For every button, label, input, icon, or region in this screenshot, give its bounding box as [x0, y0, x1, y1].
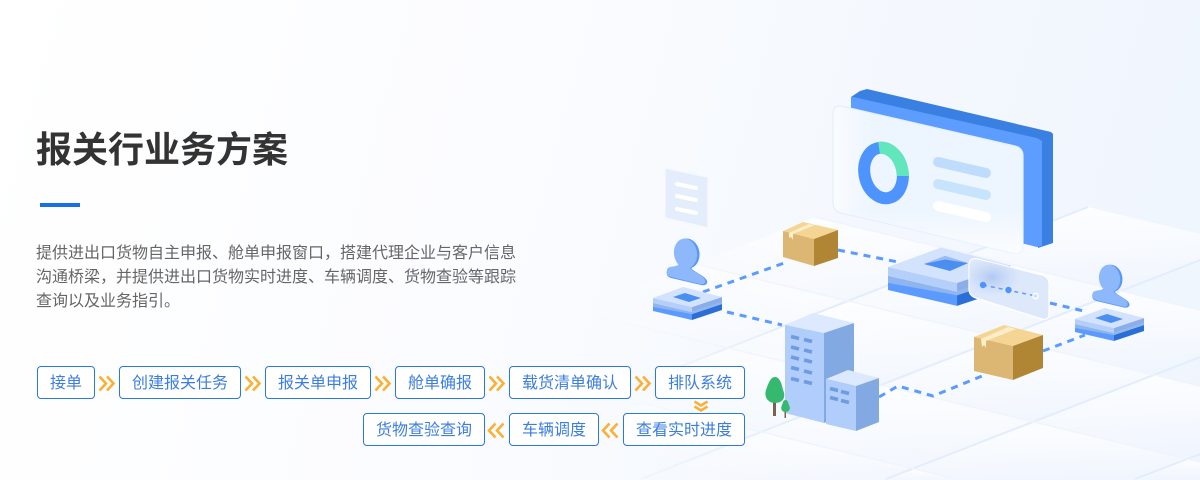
tall building — [785, 313, 854, 423]
arrow 4 — [490, 376, 504, 390]
step: 载货清单确认 — [509, 366, 631, 399]
step: 查看实时进度 — [623, 413, 745, 446]
step: 车辆调度: 车辆调度 — [522, 422, 586, 439]
arrow 2 — [246, 376, 260, 390]
arrow 3 — [376, 376, 390, 390]
small platform right — [1075, 308, 1144, 341]
step: 排队系统: 排队系统 — [668, 375, 732, 392]
arrow 6 — [603, 424, 618, 438]
office buildings — [785, 313, 879, 431]
step: 接单: 接单 — [50, 375, 82, 392]
arrow 7 — [489, 424, 504, 438]
step: 载货清单确认: 载货清单确认 — [522, 375, 618, 392]
isometric illustration — [653, 89, 1200, 480]
step: 排队系统 — [655, 366, 745, 399]
donut chart — [860, 144, 907, 202]
step: 报关单申报: 报关单申报 — [278, 375, 358, 392]
large platform — [888, 247, 1010, 306]
title accent bar — [40, 203, 80, 207]
description text: 查询以及业务指引。 — [36, 293, 180, 310]
title: 报关行业务方案 — [36, 129, 288, 170]
glass tracking card — [962, 257, 1049, 319]
description text: 沟通桥梁，并提供进出口货物实时进度、车辆调度、货物查验等跟踪 — [36, 269, 516, 286]
trees — [765, 377, 790, 418]
step: 货物查验查询: 货物查验查询 — [376, 422, 472, 439]
step: 查看实时进度: 查看实时进度 — [636, 422, 732, 439]
small platform left — [653, 287, 722, 320]
arrow down — [694, 402, 708, 410]
glass screen — [833, 106, 1023, 253]
step: 舱单确报 — [395, 366, 485, 399]
parcel box top — [783, 222, 838, 266]
arrow 5 — [636, 376, 650, 390]
description text — [36, 244, 516, 310]
step: 创建报关任务 — [119, 366, 241, 399]
step: 车辆调度 — [509, 413, 599, 446]
description text: 提供进出口货物自主申报、舱单申报窗口，搭建代理企业与客户信息 — [36, 245, 516, 262]
step: 货物查验查询 — [363, 413, 485, 446]
person right — [1092, 263, 1129, 308]
step: 创建报关任务: 创建报关任务 — [132, 375, 228, 392]
list bars — [938, 162, 986, 217]
low building — [826, 370, 879, 431]
document icon — [665, 168, 708, 228]
arrow 1 — [100, 376, 114, 390]
step: 报关单申报 — [265, 366, 371, 399]
floor grid — [662, 206, 1200, 480]
dashed connection lines — [703, 250, 1088, 397]
parcel box bottom — [974, 325, 1043, 380]
step: 接单 — [37, 366, 95, 399]
monitor frame — [851, 89, 1053, 248]
person left — [667, 237, 707, 285]
step: 舱单确报: 舱单确报 — [408, 375, 472, 392]
monitor — [833, 89, 1053, 253]
